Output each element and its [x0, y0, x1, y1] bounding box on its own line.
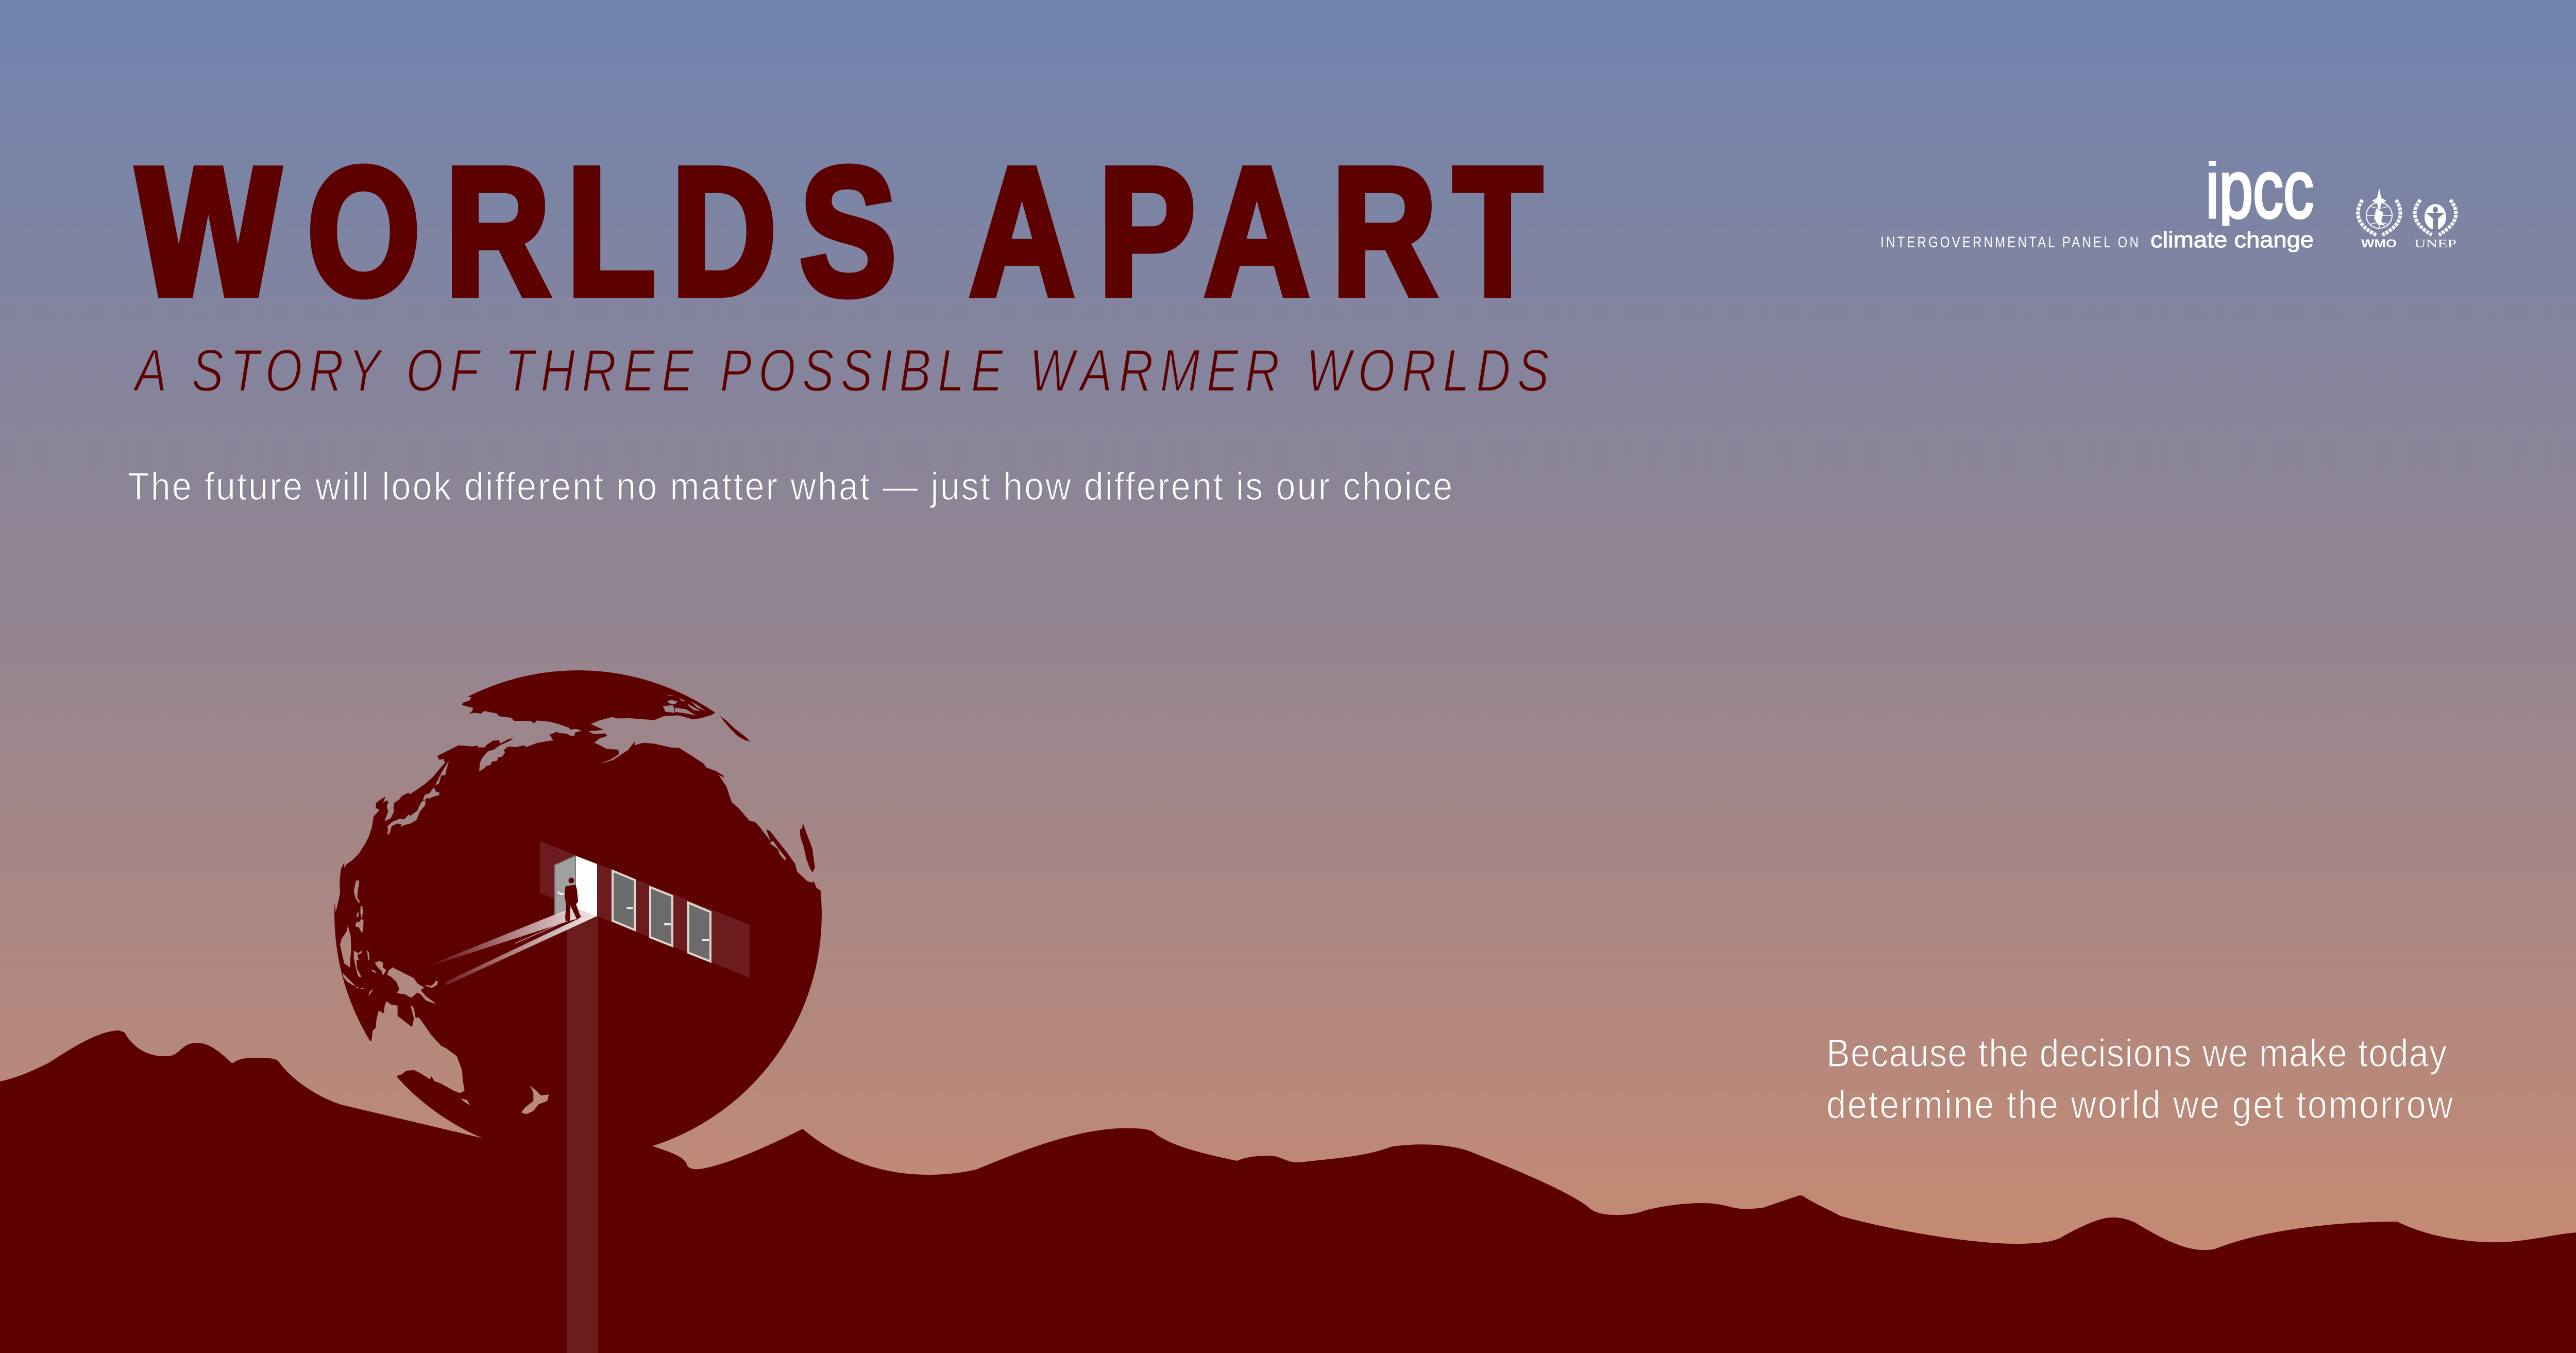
closing statement [1826, 1032, 2453, 1127]
closed door 1 [613, 871, 635, 930]
open door handle [558, 892, 564, 894]
tagline: The future will look different no matter what — just how different is our choice [128, 465, 1452, 509]
title: W [133, 136, 284, 335]
light beam on the floor [424, 907, 597, 985]
WMO label: WMO [2361, 237, 2397, 250]
line 2: determine the world we get tomorrow [1826, 1084, 2453, 1127]
person silhouette [565, 878, 582, 922]
subtitle: A STORY OF THREE POSSIBLE WARMER WORLDS [132, 337, 1549, 404]
terrain silhouette [0, 1030, 2576, 1353]
panel: doorway wall [424, 841, 750, 985]
ipcc wordmark: ipcc [2206, 143, 2314, 235]
open doorway light [575, 856, 597, 916]
logo: IPCC, WMO and UNEP [1882, 161, 2458, 252]
thin light line within shadow [515, 922, 563, 943]
title: ORLDS APART [307, 130, 1542, 333]
icon: UNEP emblem [2415, 200, 2456, 235]
open door [555, 856, 575, 915]
line 1: Because the decisions we make today [1826, 1032, 2447, 1075]
closed door 2 [650, 887, 672, 946]
UNEP label: UNEP [2414, 237, 2456, 250]
light column beneath the doorway [567, 916, 598, 1353]
globe with continents cut out [334, 670, 822, 1158]
closed door 3 [688, 903, 710, 961]
climate change wordmark: climate change [2150, 227, 2314, 252]
organisation name: INTERGOVERNMENTAL PANEL ON [1880, 233, 2139, 251]
wall band [540, 841, 750, 978]
icon: WMO emblem [2358, 188, 2400, 235]
